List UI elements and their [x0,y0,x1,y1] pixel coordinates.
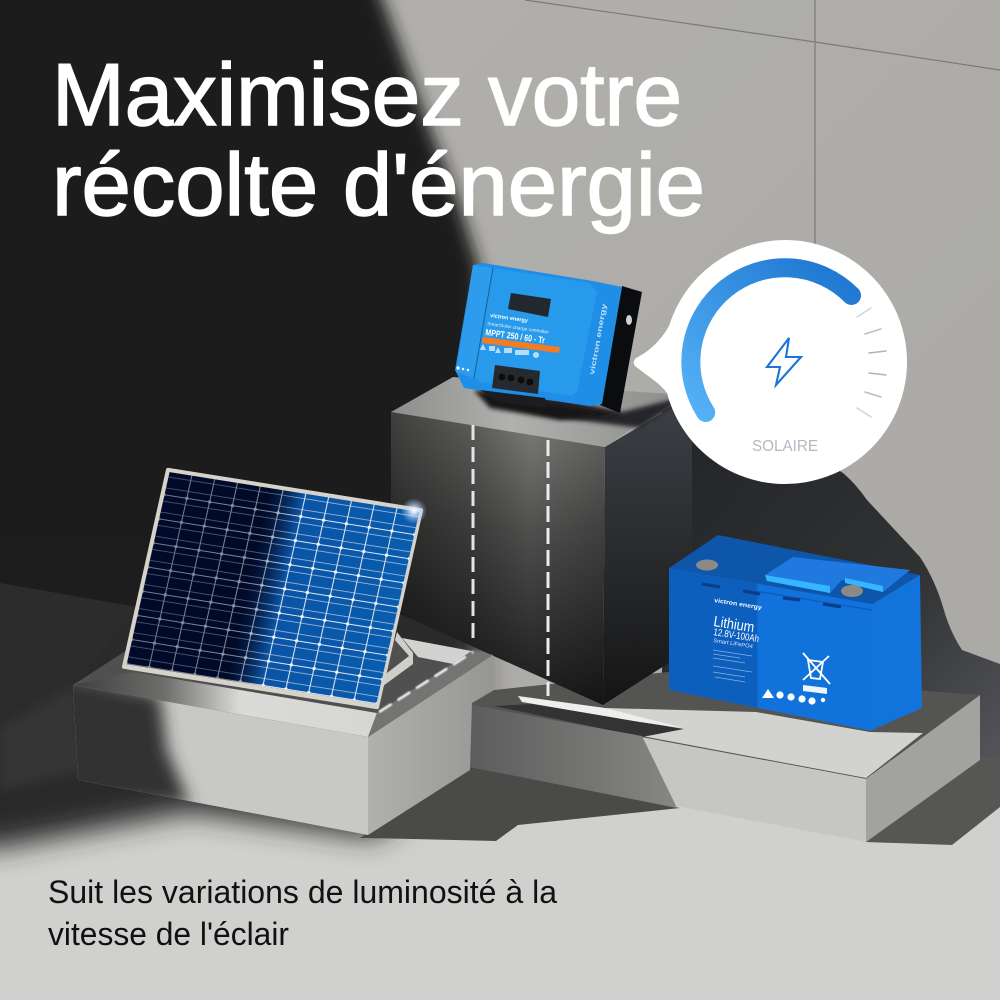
title [52,45,705,234]
plinth top [73,638,493,737]
sun glint [401,498,427,524]
title line 1: Maximisez votre [52,45,682,144]
right plinth [470,672,980,842]
terminal left [696,560,718,570]
lid highlight left [765,575,830,593]
bracket keyhole [626,315,632,325]
compliance marks [480,344,539,358]
pedestal front left shade [391,412,605,705]
battery front lip line [669,577,872,610]
lower connector [480,390,547,408]
controller shadow on pedestal [476,392,690,428]
back floor band [0,583,137,728]
shadow on wall [0,0,480,640]
frame [122,468,423,709]
shadow under controller [474,390,622,420]
slots [702,584,841,607]
battery label box [803,685,827,694]
bubble [634,240,907,484]
battery side [870,575,922,731]
panel body [122,468,423,709]
icon: lightning bolt [767,338,801,385]
small print lines [713,650,752,682]
speech bubble gauge [634,240,907,484]
mounting bracket [600,286,642,413]
terminal block [492,365,540,394]
gauge ticks [857,308,886,417]
center pedestal [391,377,692,705]
floor cast shadow centre [360,762,680,841]
floor [0,760,1000,1000]
left plinth [50,638,493,835]
plinth side [866,695,980,842]
caption line 1: Suit les variations de luminosité à la [48,874,557,910]
pedestal top face [391,377,692,447]
gauge arc [691,268,852,412]
plinth top shaded [470,672,980,779]
dark wall base [0,540,180,607]
side text: victron energy [589,303,608,375]
dashed light line left [472,425,474,645]
display cover [508,293,551,317]
plinth top lit [605,708,923,778]
controller body [455,263,622,406]
status leds [456,366,469,371]
caption [48,874,557,952]
certification icons [762,689,825,705]
dashed light line on plinth [379,652,473,712]
lower floor patch [0,686,85,790]
pedestal front face [391,412,605,705]
battery lid [765,557,910,593]
plinth front [470,705,866,842]
left floor shadow [0,570,480,848]
terminal right [841,585,863,597]
battery [669,535,922,731]
charge controller [455,263,642,420]
terminal holes [499,374,533,385]
battery top [669,535,920,604]
controller front face [474,268,597,396]
battery label: Lithium [712,613,756,636]
light streak [518,696,684,728]
solar panel [122,468,427,709]
series text: SmartSolar charge controller [487,321,549,335]
battery voltage: 12.8V-100Ah [713,627,760,645]
solar cell fill [127,472,420,704]
lid highlight right [845,578,883,592]
gauge label: SOLAIRE [752,438,818,455]
plinth front face [73,685,368,835]
lower dark wall right of pedestal [662,400,1000,770]
shadow streak [494,704,684,737]
strip seam [474,268,493,378]
caption line 2: vitesse de l'éclair [48,916,289,952]
logo text: victron energy [490,313,529,324]
plinth back lit strip [402,638,493,668]
battery type: Smart LiFePO4 [713,638,753,650]
panel stand [378,632,413,686]
solar cell lines [127,472,420,704]
pedestal right face [603,395,692,705]
shade on cell lines [127,472,420,704]
orange stripe [482,337,560,353]
title line 2: récolte d'énergie [52,135,705,234]
battery front [669,568,872,731]
controller left strip [456,265,493,378]
model name: MPPT 250 / 60 - Tr [485,327,546,345]
recycling icon [803,653,830,684]
front shadow [73,685,199,802]
plinth side face [368,655,493,835]
lit band [73,672,377,737]
plinth front shadow [470,705,677,808]
floor cast shadow right [866,758,1000,845]
battery logo text: victron energy [714,598,763,612]
right of dashes [368,650,493,737]
dashed light line right [546,440,550,696]
